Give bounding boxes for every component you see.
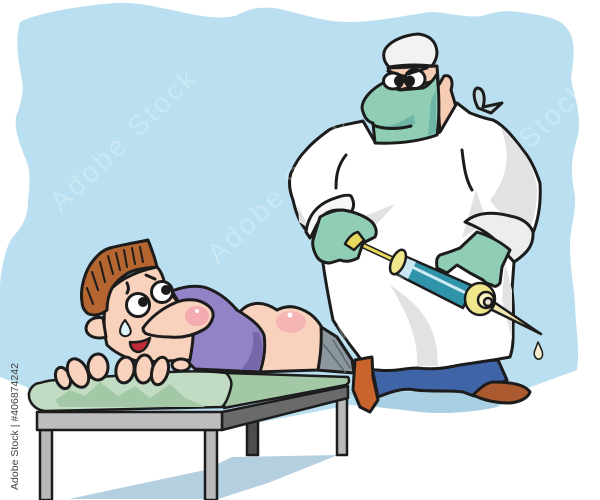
doctor legs — [372, 360, 507, 397]
red spot on buttock — [276, 311, 306, 333]
floor shadow under bench — [69, 455, 338, 499]
doctor mask — [362, 74, 439, 143]
watermarks: Adobe Stock — [44, 62, 203, 217]
plunger rod — [362, 245, 392, 259]
patient ear — [86, 317, 106, 338]
patient mouth — [130, 338, 150, 352]
liquid drop — [534, 342, 543, 359]
right glove — [437, 232, 510, 286]
syringe — [362, 245, 543, 359]
bench legs — [40, 398, 347, 500]
watermarks: Adobe Stock — [201, 114, 360, 269]
bench pillow — [29, 371, 231, 411]
bench side frame — [222, 386, 348, 430]
patient buttocks — [240, 303, 321, 372]
patient bench — [37, 373, 349, 500]
doctor gloves — [313, 210, 510, 286]
doctor — [290, 34, 540, 403]
left hand fingers — [53, 365, 73, 391]
barrel — [392, 254, 473, 308]
patient tear — [120, 320, 131, 336]
coat shading — [298, 126, 537, 366]
needle — [484, 298, 541, 334]
bench front frame — [37, 412, 222, 430]
patient hands — [53, 354, 190, 391]
patient head — [104, 267, 205, 362]
doctor forehead — [388, 66, 438, 90]
pillow shading — [55, 382, 205, 407]
mask shading — [375, 90, 436, 136]
patient trousers — [316, 325, 354, 373]
patient nose — [143, 300, 213, 337]
rear mat — [224, 373, 349, 408]
patient left shoe — [353, 357, 378, 412]
image id vertical text: Adobe Stock | #406874242 — [9, 363, 21, 490]
barrel collar — [387, 247, 409, 277]
doctor eyes with glasses — [384, 68, 427, 89]
patient hair — [81, 240, 157, 315]
patient eyebrow — [127, 275, 155, 293]
hair strands — [87, 247, 143, 304]
patient — [81, 240, 354, 373]
watermarks: Adobe — [328, 264, 414, 349]
doctor coat bow tie — [474, 88, 502, 113]
watermarks — [44, 62, 592, 349]
barrel front cap — [465, 283, 495, 315]
patient sweater — [172, 286, 265, 372]
doctor right shoe — [473, 382, 530, 403]
left glove — [313, 210, 376, 263]
sweater shading — [240, 332, 262, 370]
coat sleeve cuffs — [306, 195, 354, 238]
plunger handle — [345, 232, 364, 250]
patient eyes — [126, 294, 150, 316]
watermarks: Stock — [513, 76, 592, 154]
doctor hat — [384, 34, 437, 67]
doctor neck and ear — [437, 76, 457, 134]
floor shadow under doctor — [345, 392, 500, 413]
coat crease lines — [336, 150, 472, 190]
doctor coat body — [290, 103, 540, 371]
right hand fingers — [172, 359, 190, 371]
